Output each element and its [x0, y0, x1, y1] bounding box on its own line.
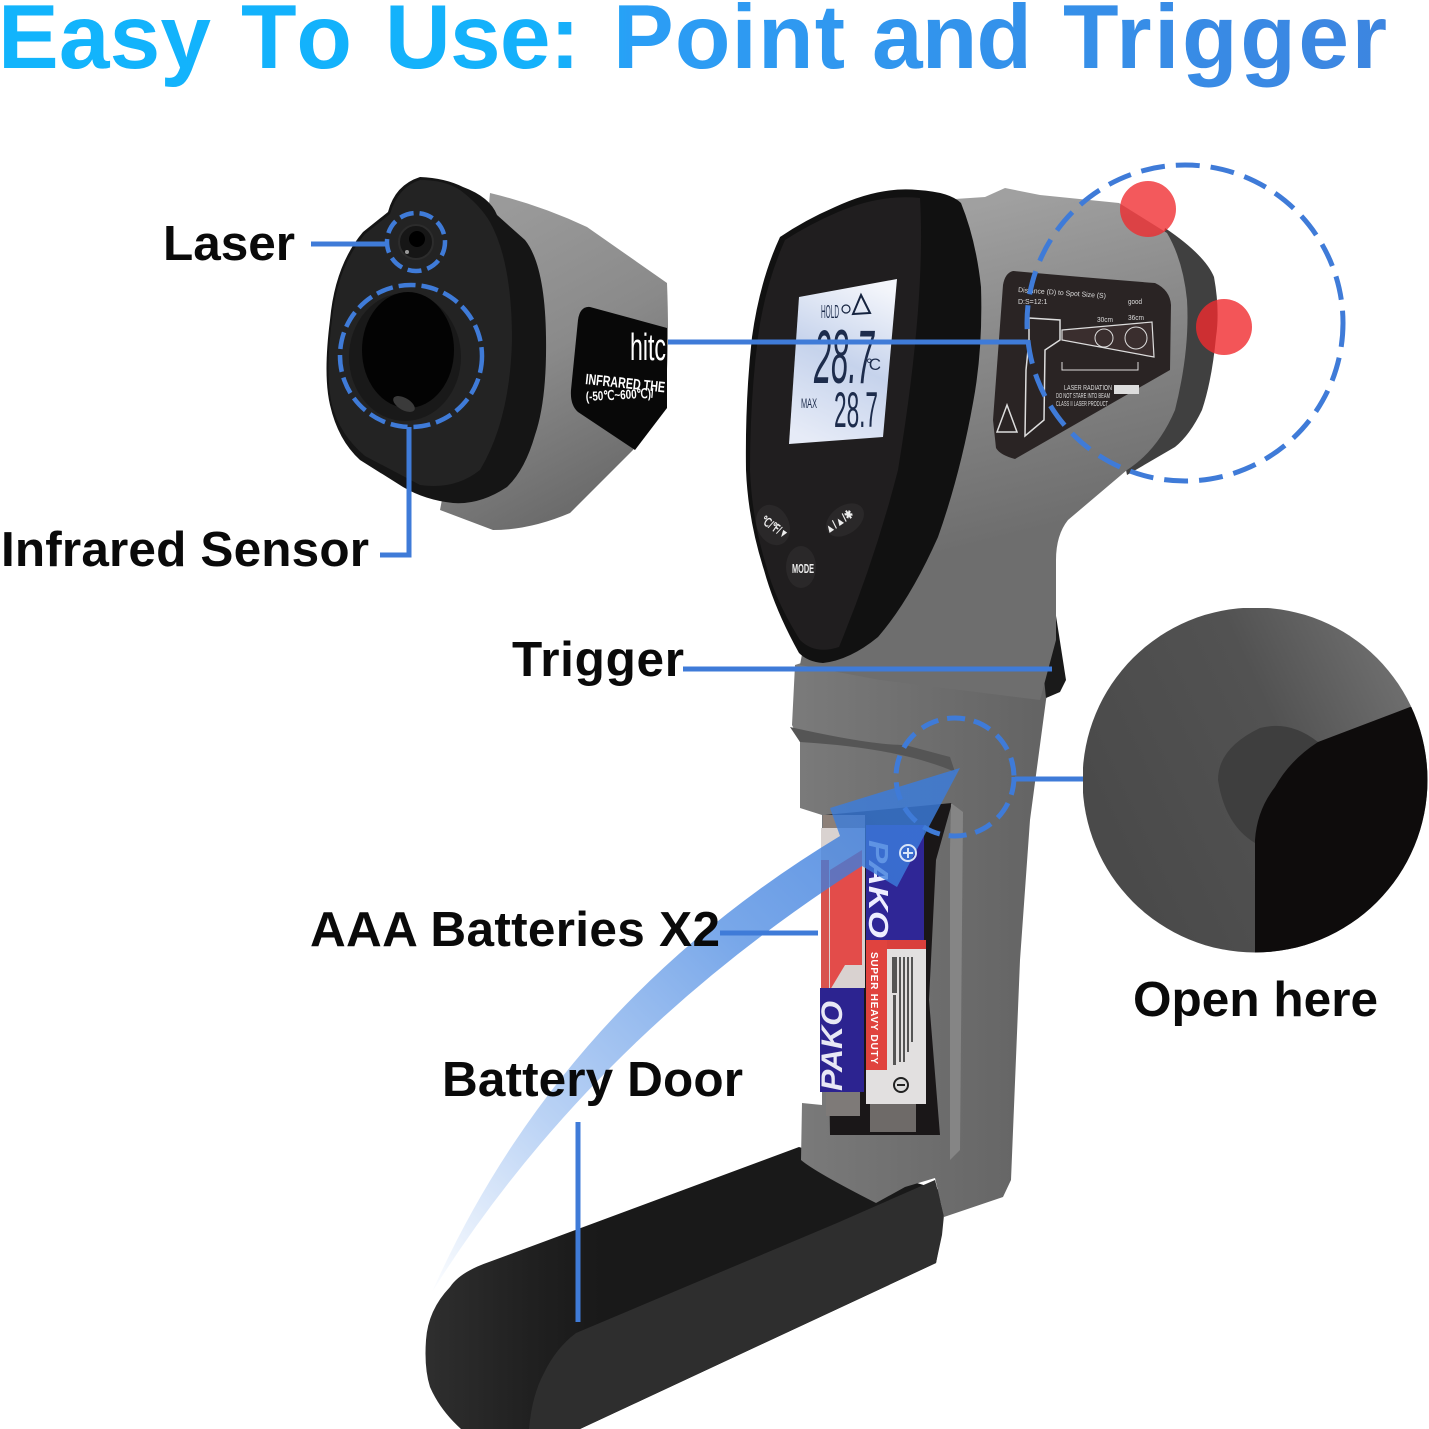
label: infrared sensor: Infrared Sensor: [1, 522, 369, 577]
battery door: [426, 1147, 944, 1429]
buttons: MODE: [792, 561, 814, 576]
battery door frame highlight: [950, 803, 963, 1160]
panel: open here close-up: [1083, 608, 1429, 955]
panel: sensor close-up: [326, 177, 668, 530]
warning label plate: DO NOT STARE INTO BEAM: [1056, 393, 1110, 400]
label gun diagram: [1025, 318, 1060, 436]
lcd screen: HOLD: [821, 302, 839, 322]
battery cavity: [825, 803, 952, 1135]
left battery: [816, 815, 865, 1116]
buttons: [750, 496, 870, 588]
title: [0, 0, 1387, 88]
dashed circle: laser range: [1027, 165, 1343, 481]
leader lines: [311, 244, 1083, 1322]
warning label plate: D:S=12:1: [1018, 299, 1047, 306]
door front lip: [529, 1180, 944, 1429]
upper body: [800, 188, 1188, 700]
close-up product plate: hitc: [630, 327, 666, 369]
front black face: [746, 189, 981, 663]
right battery: PAKO: [863, 840, 894, 938]
door interior: [426, 1147, 942, 1429]
grip collar shadow: [790, 727, 955, 772]
label: battery door: Battery Door: [442, 1052, 743, 1107]
label: batteries: AAA Batteries X2: [310, 902, 720, 957]
buttons: ▲/▲/✱: [822, 507, 856, 536]
close-up grey body: [1083, 608, 1428, 953]
lcd screen: MAX: [801, 395, 817, 411]
lcd screen: 28.7: [814, 315, 875, 400]
sensor rim: [349, 293, 461, 421]
close-up dimple: [1218, 726, 1318, 843]
red laser dots: [1120, 181, 1252, 355]
close-up black face rim: [326, 177, 546, 503]
close-up black door edge: [1255, 707, 1429, 955]
buttons: ℃/℉/▼: [758, 513, 791, 542]
close-up black face: [328, 180, 512, 486]
battery plus mark: [900, 845, 916, 861]
thermometer with battery door open: [426, 188, 1218, 1429]
sensor opening: [362, 292, 454, 408]
warning label plate: 30cm: [1097, 317, 1113, 324]
warning label plate: Distance (D) to Spot Size (S): [1018, 287, 1106, 300]
label: laser: Laser: [163, 216, 295, 271]
dashed circle: laser: [387, 213, 445, 271]
close-up product plate: INFRARED THE: [585, 371, 666, 396]
dashed circle: open point: [896, 718, 1014, 836]
lcd screen: °C: [866, 355, 881, 374]
warning label plate: 36cm: [1128, 315, 1144, 322]
insertion arrow: [432, 768, 960, 1292]
warning label plate: [993, 271, 1171, 459]
right battery: SUPER HEAVY DUTY: [868, 952, 879, 1064]
warning label plate: CLASS II LASER PRODUCT: [1056, 401, 1108, 408]
grip: [792, 600, 1056, 1217]
batteries: [816, 815, 926, 1132]
laser opening: [399, 225, 433, 259]
label beam diagram: [1062, 322, 1154, 357]
right battery: [863, 825, 926, 1132]
left battery: PAKO: [816, 1001, 849, 1091]
fine print: [892, 957, 913, 1065]
dashed circle: infrared sensor: [340, 285, 482, 427]
warning label plate: good: [1128, 299, 1142, 306]
trigger: [1040, 603, 1066, 698]
close-up product plate: [571, 307, 667, 450]
close-up housing: [440, 193, 668, 530]
sensor lens glint: [391, 393, 417, 415]
rear barrel cap: [1120, 228, 1218, 475]
label: trigger: Trigger: [512, 632, 684, 687]
close-up product plate: (-50℃~600℃)/: [585, 385, 654, 404]
lcd screen: [789, 279, 897, 444]
warning label plate: LASER RADIATION: [1064, 385, 1112, 392]
lcd screen: 28.7: [834, 382, 878, 438]
label: open here: Open here: [1133, 972, 1378, 1027]
